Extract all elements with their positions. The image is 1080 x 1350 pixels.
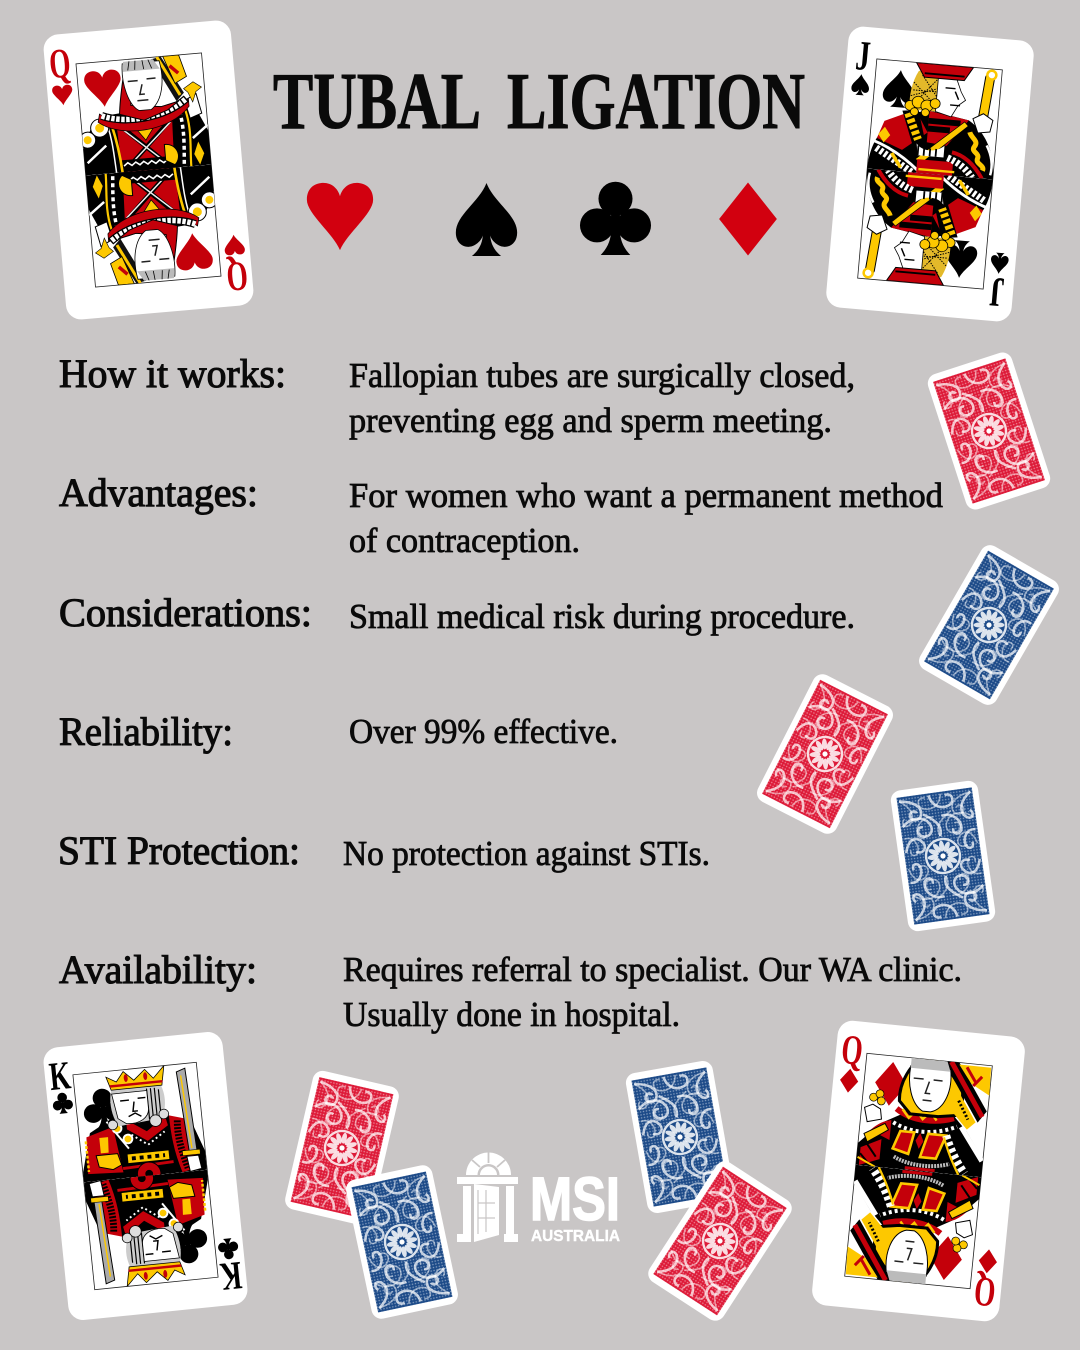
row: reliability bbox=[59, 709, 618, 754]
icon: spade bbox=[456, 183, 517, 256]
playing card: queen of hearts: Q bbox=[47, 39, 72, 88]
playing card: king of clubs bbox=[42, 1031, 249, 1321]
description: Fallopian tubes are surgically closed, bbox=[349, 356, 855, 395]
row: advantages bbox=[59, 470, 943, 560]
label: How it works: bbox=[59, 351, 286, 396]
icon: door with arch bbox=[457, 1152, 518, 1242]
logo: MSI Australia bbox=[457, 1152, 620, 1245]
description bbox=[343, 950, 962, 1034]
card back: blue, bottom left pair bbox=[344, 1163, 460, 1321]
description bbox=[349, 356, 855, 440]
logo subtitle: AUSTRALIA bbox=[531, 1228, 620, 1245]
title: LIGATION bbox=[507, 56, 805, 146]
card suit icons row bbox=[307, 182, 777, 256]
playing card: queen of hearts bbox=[42, 19, 255, 321]
card back: red, bottom right pair bbox=[644, 1157, 796, 1325]
playing card: queen of hearts: Q bbox=[225, 252, 250, 301]
card back: red, upper right bbox=[925, 350, 1053, 512]
label: Reliability: bbox=[59, 709, 233, 754]
playing card: king of clubs: K bbox=[218, 1253, 244, 1298]
description: Over 99% effective. bbox=[349, 712, 618, 751]
playing card: queen of diamonds: Q bbox=[972, 1268, 998, 1317]
description: of contraception. bbox=[349, 521, 580, 560]
row: how it works bbox=[59, 351, 855, 440]
playing card: queen of diamonds bbox=[811, 1019, 1026, 1323]
title: TUBAL bbox=[273, 56, 481, 146]
playing card: queen of diamonds: Q bbox=[839, 1025, 865, 1074]
playing card: jack of spades: J bbox=[854, 32, 872, 80]
row: sti protection bbox=[58, 828, 710, 873]
card back: red, middle right bbox=[754, 671, 896, 837]
card back: blue, lower right bbox=[890, 780, 996, 932]
description: Small medical risk during procedure. bbox=[349, 597, 855, 636]
playing card: jack of spades: J bbox=[988, 268, 1006, 316]
description: preventing egg and sperm meeting. bbox=[349, 401, 832, 440]
label: Availability: bbox=[59, 947, 257, 992]
description: Requires referral to specialist. Our WA clinic. bbox=[343, 950, 962, 989]
label: STI Protection: bbox=[58, 828, 300, 873]
label: Advantages: bbox=[59, 470, 258, 515]
card back: blue, bottom right pair bbox=[624, 1059, 736, 1215]
card back: red, bottom left pair bbox=[283, 1069, 401, 1227]
description bbox=[349, 476, 943, 560]
playing card: jack of spades bbox=[825, 25, 1035, 323]
description: No protection against STIs. bbox=[343, 834, 710, 873]
card back: blue, right bbox=[915, 542, 1063, 708]
icon: diamond bbox=[719, 182, 777, 256]
logo wordmark: MSI bbox=[530, 1165, 620, 1233]
title bbox=[273, 56, 805, 146]
label: Considerations: bbox=[59, 590, 312, 635]
description: Usually done in hospital. bbox=[343, 995, 680, 1034]
row: considerations bbox=[59, 590, 855, 636]
icon: heart bbox=[307, 183, 373, 250]
row: availability bbox=[59, 947, 962, 1034]
description: For women who want a permanent method bbox=[349, 476, 943, 515]
icon: club bbox=[580, 182, 651, 255]
playing card: king of clubs: K bbox=[47, 1054, 73, 1099]
